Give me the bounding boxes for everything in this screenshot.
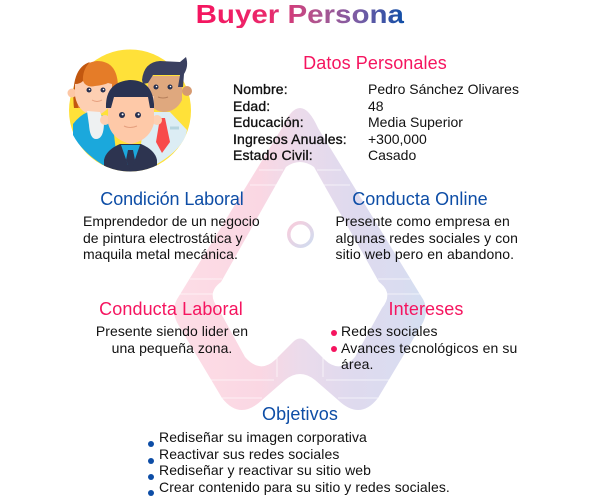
personal data table — [233, 81, 519, 163]
personal data table: Casado — [368, 147, 416, 163]
personal data table: Educación: — [233, 114, 304, 130]
list: Intereses: área. — [341, 356, 374, 372]
heading: Conducta Laboral: Conducta Laboral — [99, 299, 243, 319]
personal data table: Pedro Sánchez Olivares — [368, 81, 519, 97]
man front — [100, 80, 162, 175]
list: Intereses: Redes sociales — [341, 323, 438, 339]
heading: Objetivos: Objetivos — [262, 404, 338, 424]
list: Intereses — [331, 323, 517, 372]
personal data table: +300,000 — [368, 130, 427, 146]
list: Objetivos: Crear contenido para su sitio y redes sociales. — [159, 478, 450, 494]
heading: Intereses: Intereses — [389, 299, 463, 319]
heading: Condición Laboral: Condición Laboral — [100, 189, 244, 209]
woman — [68, 61, 118, 168]
personal data table: Estado Civil: — [233, 147, 313, 163]
text: Conducta Online: sitio web pero en abandono. — [336, 246, 514, 262]
text: Conducta Laboral: Presente siendo lider en — [96, 323, 248, 339]
heading: Conducta Online: Conducta Online — [352, 189, 488, 209]
list: Objetivos: Rediseñar su imagen corporativa — [159, 429, 367, 445]
text: Conducta Online: algunas redes sociales y con — [336, 230, 518, 246]
text: Condición Laboral: Emprendedor de un negocio — [83, 213, 260, 229]
icon: three people avatar — [68, 50, 192, 172]
text: Condición Laboral — [83, 213, 260, 262]
personal data table: Edad: — [233, 98, 270, 114]
list: Objetivos: Reactivar sus redes sociales — [159, 446, 339, 462]
text: Conducta Online: Presente como empresa en — [336, 213, 510, 229]
personal data table: Media Superior — [368, 114, 463, 130]
list: Objetivos: Rediseñar y reactivar su sitio web — [159, 462, 371, 478]
text: Condición Laboral: maquila metal mecánica. — [83, 246, 238, 262]
text: Conducta Laboral — [96, 323, 248, 356]
list: Objetivos — [148, 429, 450, 496]
heading: Datos Personales: Datos Personales — [303, 53, 447, 73]
text: Condición Laboral: de pintura electrostática y — [83, 230, 243, 246]
man right — [140, 57, 192, 168]
list: Intereses: Avances tecnológicos en su — [341, 340, 517, 356]
personal data table: 48 — [368, 98, 384, 114]
personal data table: Nombre: — [233, 81, 288, 97]
center ring — [289, 223, 312, 246]
personal data table: Ingresos Anuales: — [233, 130, 347, 146]
text: Conducta Laboral: una pequeña zona. — [112, 340, 232, 356]
text: Conducta Online — [336, 213, 518, 262]
